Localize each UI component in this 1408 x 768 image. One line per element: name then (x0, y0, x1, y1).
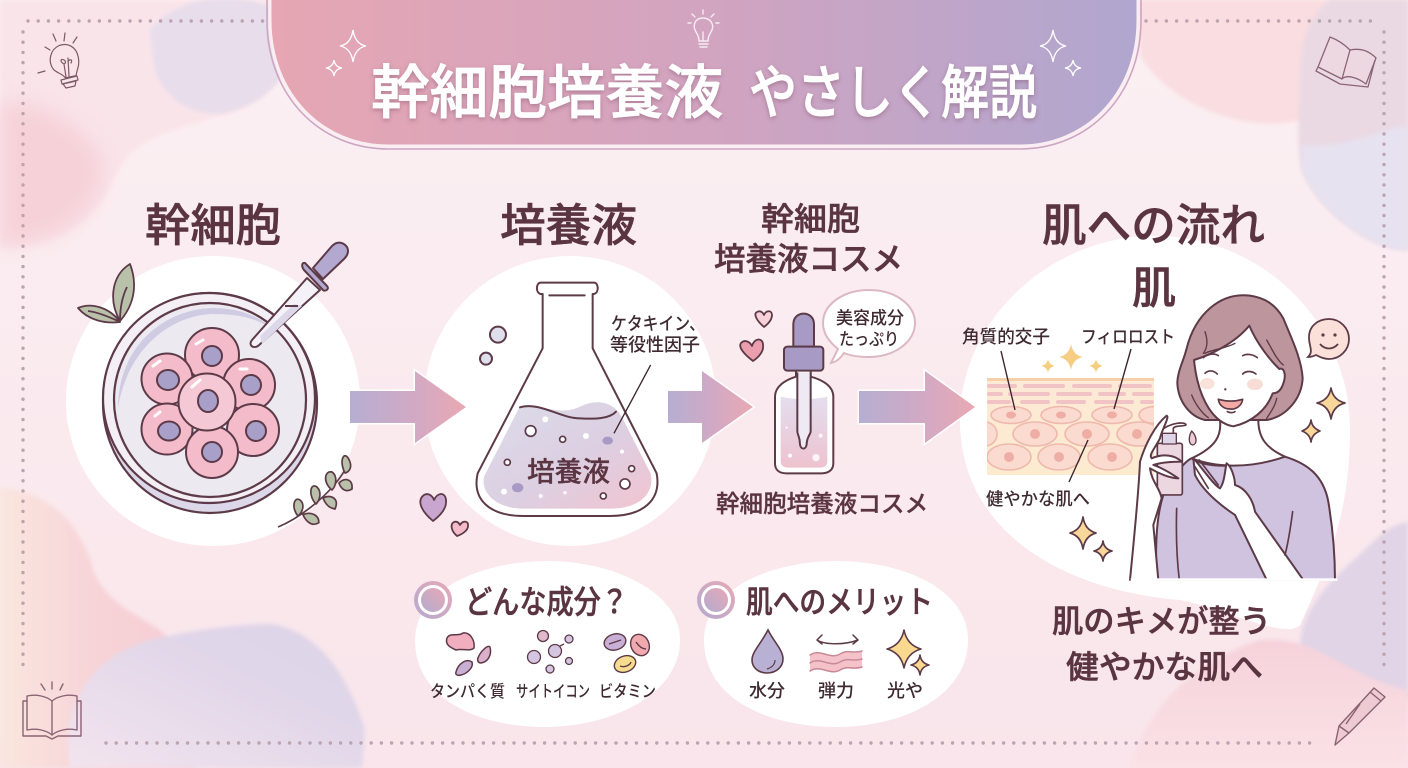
icon: hearts by bottle (740, 311, 772, 361)
icon: smile bubble (1308, 319, 1349, 359)
forearm and hand (1193, 458, 1303, 580)
text: skin texture result: 肌のキメが整う (1052, 603, 1271, 639)
panel: white circle stem cell (66, 256, 360, 546)
hair (1177, 295, 1303, 420)
arrow 2 (668, 371, 753, 443)
facial features (1203, 354, 1257, 413)
arrow 1 (350, 371, 466, 443)
label: protein: タンパく質 (430, 682, 505, 701)
icon: gold sparkles above skin (1041, 344, 1103, 373)
icon: leaves top left (78, 264, 134, 322)
icon: flask (476, 283, 659, 516)
face (1194, 326, 1285, 426)
icon: petri dish (103, 293, 317, 513)
holding hand (1130, 416, 1182, 580)
icon: protein (446, 633, 491, 675)
heading: cosmetics: 培養液コスメ (714, 241, 903, 277)
icon: banner sparkles right (1040, 30, 1081, 76)
heading: flow to skin: 肌 (1132, 264, 1176, 313)
heading: cosmetics (714, 201, 903, 277)
icon: open book top right (1316, 37, 1376, 87)
icon: dropper (251, 243, 348, 347)
text: skin texture result: 健やかな肌へ (1066, 649, 1263, 685)
label: filorost: フィロロスト (1081, 327, 1175, 347)
heading: flow to skin: 肌への流れ (1042, 200, 1265, 251)
icon: water drop (752, 630, 783, 673)
illustration: woman applying serum (1130, 295, 1337, 581)
label: elasticity: 弾力 (818, 681, 854, 701)
panel: white circle culture (424, 256, 716, 546)
arrow 3 (859, 371, 975, 443)
icon: ring bullet (414, 581, 452, 619)
label: moisture: 水分 (749, 681, 785, 701)
label: vitamin: ビタミン (599, 682, 656, 701)
heading: stem cells: 幹細胞 (145, 200, 281, 251)
callout: plenty of beauty ingredients: たっぷり (839, 330, 899, 349)
label: toward healthy skin: 健やかな肌へ (986, 489, 1090, 509)
sweater (1156, 457, 1335, 580)
label: radiance: 光や (887, 681, 923, 701)
banner heading: やさしく解説 (749, 61, 1037, 126)
icon: light bulb (38, 33, 82, 88)
icon: banner bulb (688, 10, 719, 47)
panel heading: 肌へのメリット (746, 585, 933, 620)
icon: pencil (1335, 688, 1385, 745)
heading: flow to skin (1042, 200, 1265, 313)
label: cytokines (610, 314, 705, 355)
neck (1192, 420, 1285, 466)
banner heading: 幹細胞培養液 (371, 61, 723, 126)
label: culture text in flask: 培養液 (527, 456, 610, 487)
icon: gold sparkles right (1302, 388, 1345, 442)
title banner (267, 0, 1141, 149)
icon: elasticity waves (810, 635, 862, 672)
text: skin texture result (1052, 603, 1271, 685)
icon: open book bottom left (23, 682, 81, 739)
panel: skin merits (697, 561, 968, 727)
label: cytokines: ケタキイン、 (611, 314, 705, 334)
heading: culture medium: 培養液 (500, 200, 637, 251)
callout: plenty of beauty ingredients: 美容成分 (836, 308, 904, 328)
icon: shine sparkle (887, 630, 929, 675)
banner heading (371, 61, 1037, 126)
heading: cosmetics: 幹細胞 (761, 201, 860, 237)
diagram: skin layers (987, 378, 1154, 475)
serum pump bottle (1160, 423, 1186, 435)
icon: vitamins (602, 631, 653, 675)
cells cluster (142, 328, 279, 478)
label: stem cell culture cosmetics: 幹細胞培養液コスメ (716, 491, 928, 518)
icon: gold sparkles lower (1070, 517, 1112, 561)
callout: plenty of beauty ingredients (823, 290, 915, 363)
icon: branch bottom right (278, 456, 352, 527)
icon: cytokine (528, 630, 573, 673)
icon: ring bullet (697, 581, 735, 619)
icon: serum bottle (775, 314, 833, 473)
icon: banner sparkles left (326, 30, 366, 76)
icon: hearts by flask (420, 494, 468, 536)
label: cytokines: 等役性因子 (610, 335, 700, 355)
panel heading: どんな成分？ (465, 584, 628, 620)
label: corneocyte: 角質的交子 (962, 327, 1050, 347)
label: cytokine: サイトイコン (516, 683, 590, 701)
panel: white circle skin (960, 236, 1350, 629)
panel: what ingredients (414, 561, 680, 727)
label lines: skin diagram (1001, 349, 1131, 482)
